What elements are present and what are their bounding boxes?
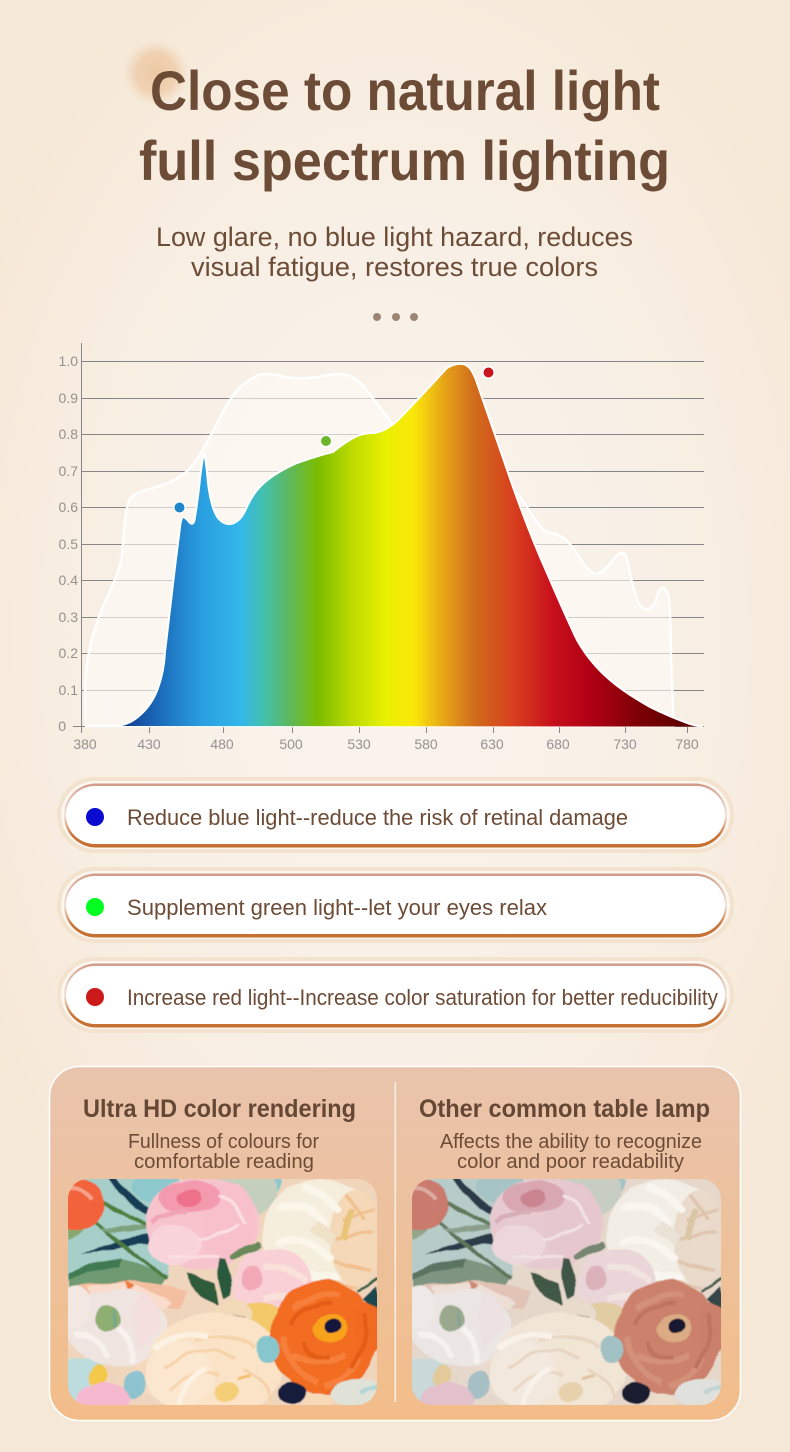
- spectrum chart: [58, 343, 704, 752]
- pill: reduce blue light: Reduce blue light--reduce the risk of retinal damage: [127, 805, 628, 830]
- x axis labels: 680: [546, 736, 570, 752]
- y axis labels: 0: [58, 718, 66, 734]
- y axis labels: 0.1: [59, 682, 78, 698]
- pill: supplement green light: Supplement green light--let your eyes relax: [127, 895, 547, 920]
- x axis labels: 580: [414, 736, 438, 752]
- title: full spectrum lighting: [139, 129, 670, 192]
- subtitle: Low glare, no blue light hazard, reduces: [156, 222, 633, 252]
- subtitle: [156, 222, 633, 282]
- x axis labels: 780: [675, 736, 699, 752]
- green marker: [320, 435, 332, 447]
- pill: reduce blue light: [57, 777, 734, 853]
- y axis labels: 0.5: [59, 536, 78, 552]
- full spectrum area: [112, 364, 703, 726]
- decorative glow circle: [123, 40, 189, 106]
- y axis labels: 0.9: [59, 390, 78, 406]
- right column: common lamp: [412, 1099, 721, 1405]
- right column: common lamp: Affects the ability to recognize: [440, 1131, 702, 1153]
- panel: comparison: [50, 1066, 740, 1420]
- painting: vivid flowers: [68, 1179, 377, 1405]
- pill: increase red light: Increase red light--Increase color saturation for better reducibility: [127, 985, 718, 1010]
- x axis labels: 430: [137, 736, 161, 752]
- right column: common lamp: Other common table lamp: [419, 1095, 710, 1123]
- x axis labels: 730: [613, 736, 637, 752]
- x axis labels: [73, 736, 699, 752]
- pill: supplement green light: [57, 867, 734, 943]
- three dots separator: [373, 313, 418, 321]
- y axis labels: 0.3: [59, 609, 78, 625]
- x axis labels: 480: [210, 736, 234, 752]
- y axis labels: [58, 353, 78, 734]
- x axis labels: 530: [347, 736, 371, 752]
- x axis labels: 630: [480, 736, 504, 752]
- red marker: [483, 367, 494, 378]
- y axis labels: 1.0: [59, 353, 78, 369]
- y axis labels: 0.4: [59, 572, 78, 588]
- y axis labels: 0.2: [59, 645, 78, 661]
- y axis labels: 0.6: [59, 499, 78, 515]
- left column: ultra HD: [68, 1099, 377, 1405]
- natural light curve: [85, 374, 674, 726]
- painting: muted flowers: [412, 1179, 721, 1405]
- x axis labels: 500: [279, 736, 303, 752]
- y axis labels: 0.7: [59, 463, 78, 479]
- subtitle: visual fatigue, restores true colors: [191, 252, 598, 282]
- left column: ultra HD: comfortable reading: [134, 1151, 314, 1173]
- right column: common lamp: color and poor readability: [457, 1151, 684, 1173]
- blue marker: [174, 502, 185, 513]
- title: Close to natural light: [150, 59, 660, 122]
- y axis labels: 0.8: [59, 426, 78, 442]
- pill: increase red light: [57, 957, 734, 1033]
- title: [139, 59, 670, 192]
- left column: ultra HD: Ultra HD color rendering: [83, 1095, 356, 1123]
- x axis labels: 380: [73, 736, 97, 752]
- left column: ultra HD: Fullness of colours for: [128, 1131, 319, 1153]
